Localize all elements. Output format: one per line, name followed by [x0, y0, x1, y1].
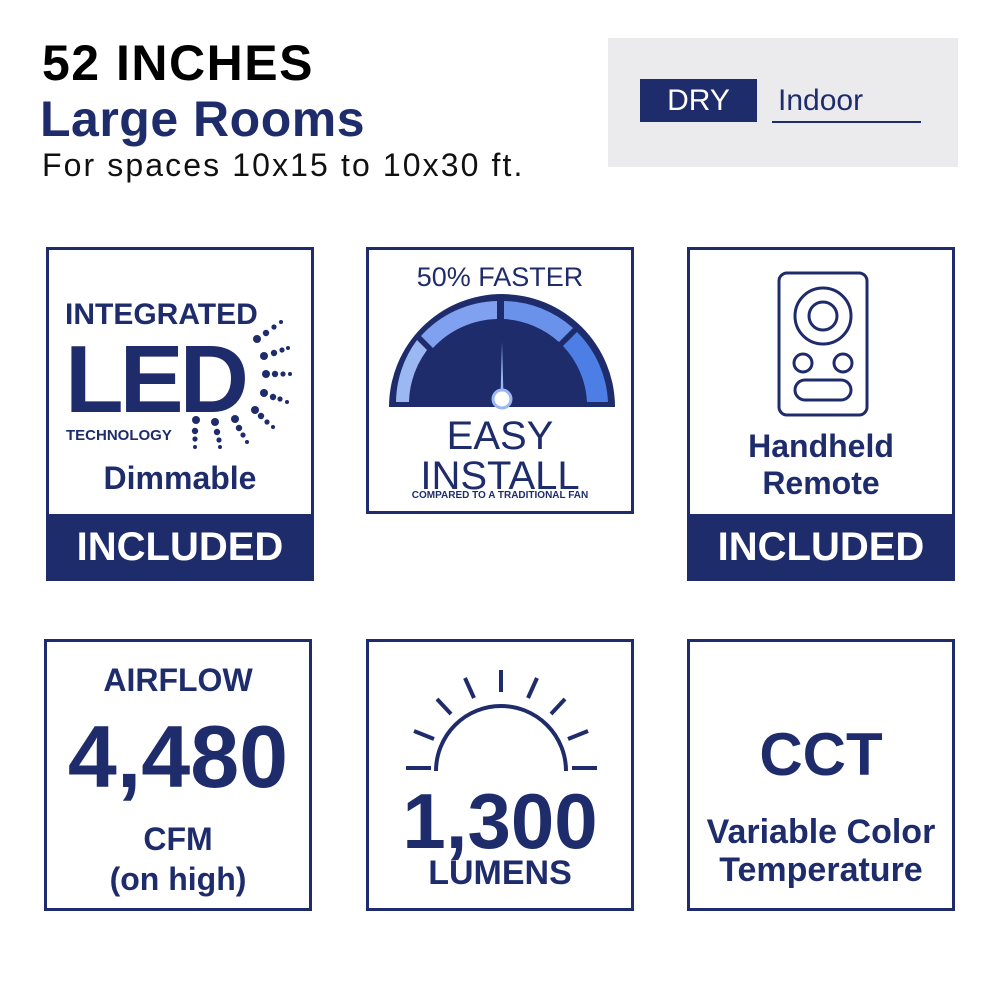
panel: remote: Remote — [762, 465, 880, 501]
panel: easy install: INSTALL — [420, 454, 580, 498]
indoor label: Indoor — [778, 84, 863, 117]
icon: light dots — [192, 320, 292, 449]
rating panel — [608, 38, 958, 167]
panel: CCT: Variable Color — [707, 813, 935, 851]
panel: CCT: Temperature — [719, 851, 923, 889]
panel: lumens: 1,300 — [402, 777, 598, 865]
icon: speed gauge — [389, 294, 615, 410]
panel: integrated LED: LED — [65, 326, 245, 433]
panel: easy install: COMPARED TO A TRADITIONAL FAN — [412, 490, 588, 501]
icon: sun — [406, 670, 597, 771]
icon: remote — [778, 272, 868, 416]
included band: INCLUDED — [77, 525, 283, 569]
panel: airflow: 4,480 — [68, 707, 288, 806]
included band — [46, 514, 314, 581]
panel: easy install — [366, 247, 634, 514]
title: 52 INCHES — [42, 35, 314, 91]
panel: airflow: CFM — [143, 821, 213, 857]
included band: INCLUDED — [718, 525, 924, 569]
panel: lumens: LUMENS — [428, 854, 572, 892]
panel: CCT — [687, 639, 955, 911]
indoor label — [772, 79, 921, 123]
panel: airflow: (on high) — [110, 861, 246, 897]
panel: remote — [687, 247, 955, 581]
included band — [687, 514, 955, 581]
panel: easy install: EASY — [447, 414, 553, 458]
panel: integrated LED: INTEGRATED — [65, 298, 258, 331]
dry label: DRY — [667, 84, 730, 117]
panel: integrated LED — [46, 247, 314, 581]
panel: airflow: AIRFLOW — [103, 662, 253, 698]
dry label — [640, 79, 757, 122]
panel: airflow — [44, 639, 312, 911]
panel: integrated LED: TECHNOLOGY — [66, 427, 172, 444]
panel: integrated LED: Dimmable — [104, 460, 256, 496]
description: For spaces 10x15 to 10x30 ft. — [42, 147, 524, 183]
subtitle: Large Rooms — [40, 91, 365, 147]
panel: remote: Handheld — [748, 428, 894, 464]
panel: CCT: CCT — [759, 721, 883, 788]
panel: easy install: 50% FASTER — [417, 262, 583, 292]
panel: lumens — [366, 639, 634, 911]
